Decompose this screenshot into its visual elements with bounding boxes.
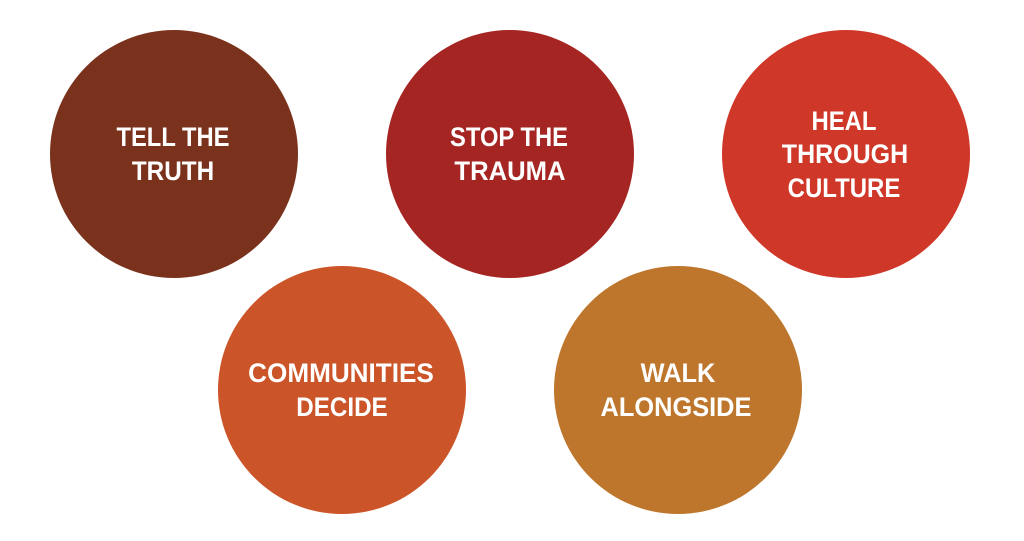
label: tell the truth	[116, 122, 229, 186]
label: heal through culture	[782, 106, 908, 203]
label: stop the trauma: STOP THE	[450, 122, 568, 152]
label: heal through culture: THROUGH	[782, 139, 908, 169]
label: tell the truth: TELL THE	[116, 122, 229, 152]
circle: communities decide	[218, 266, 466, 514]
label: walk alongside	[601, 358, 751, 422]
label: tell the truth: TRUTH	[132, 156, 214, 186]
label: communities decide: COMMUNITIES	[248, 358, 434, 388]
label: communities decide: DECIDE	[296, 392, 387, 422]
label: stop the trauma: TRAUMA	[454, 156, 565, 186]
label: walk alongside: ALONGSIDE	[601, 392, 751, 422]
circle: stop the trauma	[386, 30, 634, 278]
circle: heal through culture	[722, 30, 970, 278]
label: heal through culture: CULTURE	[787, 173, 900, 203]
label: walk alongside: WALK	[640, 358, 715, 388]
label: communities decide	[248, 358, 434, 422]
label: heal through culture: HEAL	[811, 106, 876, 136]
label: stop the trauma	[450, 122, 568, 186]
circle: tell the truth	[50, 30, 298, 278]
circle: walk alongside	[554, 266, 802, 514]
